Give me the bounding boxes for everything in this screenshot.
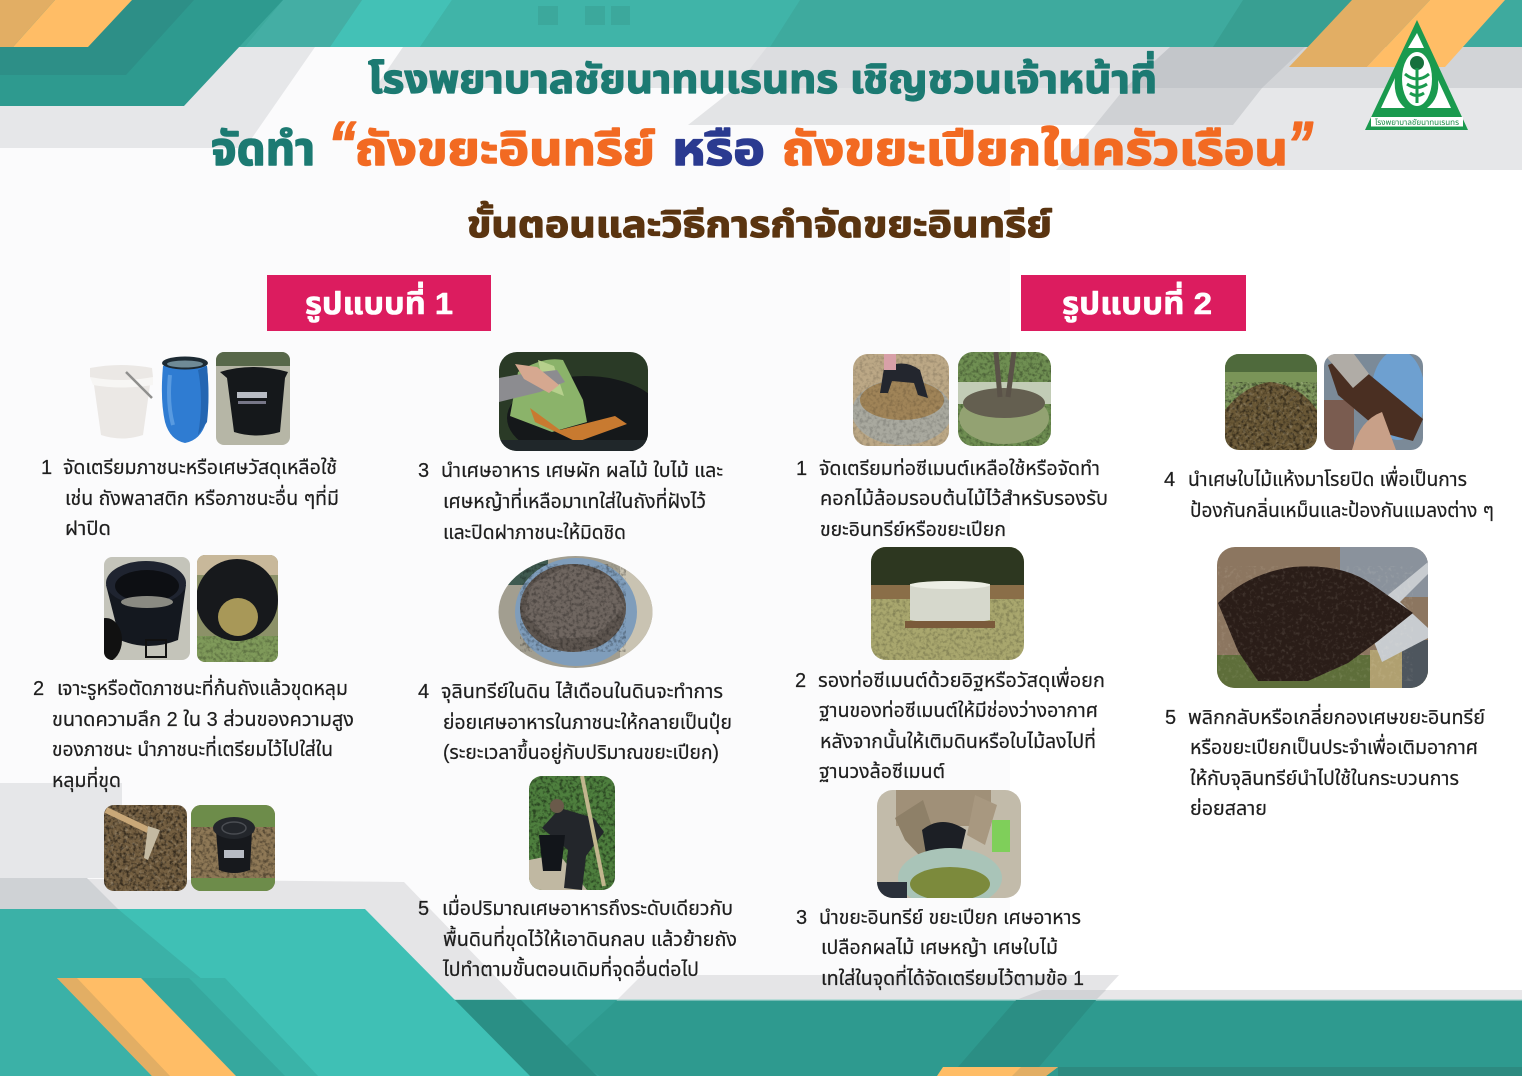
step 1 text, format 1: 1	[41, 457, 52, 479]
photo: compost in basin	[498, 555, 654, 668]
step 2 text, format 1: เจาะรูหรือตัดภาชนะที่ก้นถังแล้วขุดหลุม	[57, 674, 348, 701]
step 3 text, format 1: นำเศษอาหาร เศษผัก ผลไม้ ใบไม้ และ	[441, 459, 723, 482]
badge: format 1	[267, 275, 491, 331]
step 4 text, format 1: จุลินทรีย์ในดิน ไส้เดือนในดินจะทำการ	[441, 680, 723, 703]
photo: bin in the ground	[196, 555, 278, 662]
photo: food scraps in bin	[499, 352, 648, 451]
step 5 text, format 2: พลิกกลับหรือเกลี่ยกองเศษขยะอินทรีย์	[1188, 703, 1485, 729]
subtitle: ขั้นตอนและวิธีการกำจัดขยะอินทรีย์	[467, 200, 1052, 245]
photo: raised cement ring on grass	[871, 547, 1024, 660]
step 2 text, format 2: 2	[795, 670, 806, 692]
step 5 text, format 1	[418, 894, 737, 981]
step 5 text, format 1: ไปทำตามขั้นตอนเดิมที่จุดอื่นต่อไป	[442, 955, 699, 981]
step 1 text, format 1: จัดเตรียมภาชนะหรือเศษวัสดุเหลือใช้	[63, 456, 337, 479]
step 3 text, format 1	[418, 459, 723, 544]
photo: pile of dry leaves	[1225, 354, 1317, 450]
photo: people pouring waste	[877, 790, 1021, 908]
title line 1: โรงพยาบาลชัยนาทนเรนทร เชิญชวนเจ้าหน้าที่	[368, 51, 1157, 102]
step 4 text, format 1: (ระยะเวลาขึ้นอยู่กับปริมาณขยะเปียก)	[443, 738, 719, 765]
step 2 text, format 2	[795, 666, 1105, 783]
step 5 text, format 1: 5	[418, 898, 429, 920]
photo: digging soil	[104, 805, 187, 891]
step 1 text, format 2: 1	[796, 458, 807, 480]
step 5 text, format 2	[1165, 703, 1485, 820]
photo: blue barrel	[162, 356, 208, 443]
step 1 text, format 1: เช่น ถังพลาสติก หรือภาชนะอื่น ๆที่มี	[65, 484, 339, 510]
step 2 text, format 1: 2	[33, 678, 44, 700]
step 3 text, format 2	[796, 907, 1084, 990]
title line 2	[211, 110, 1313, 179]
title line 2: จัดทำ	[211, 123, 315, 175]
step 2 text, format 2: หลังจากนั้นให้เติมดินหรือใบไม้ลงไปที่	[820, 727, 1096, 753]
step 4 text, format 2: นำเศษใบไม้แห้งมาโรยปิด เพื่อเป็นการ	[1188, 465, 1467, 491]
step 5 text, format 1: พื้นดินที่ขุดไว้ให้เอาดินกลบ แล้วย้ายถัง	[443, 925, 737, 951]
step 3 text, format 2: 3	[796, 907, 807, 929]
title line 2: ”	[1287, 110, 1313, 179]
step 3 text, format 1: เศษหญ้าที่เหลือมาเทใส่ในถังที่ฝังไว้	[443, 487, 706, 513]
title line 2: “	[328, 110, 356, 179]
step 2 text, format 1: หลุมที่ขุด	[52, 766, 121, 792]
photo: cement ring with leaves	[852, 354, 952, 446]
step 1 text, format 1	[41, 456, 339, 540]
step 4 text, format 1: ย่อยเศษอาหารในภาชนะให้กลายเป็นปุ๋ย	[443, 711, 732, 734]
photo: bamboo ring around tree	[958, 352, 1051, 446]
step 3 text, format 1: 3	[418, 460, 429, 482]
step 5 text, format 2: ย่อยสลาย	[1190, 797, 1267, 820]
title line 2: ถังขยะอินทรีย์	[355, 123, 655, 175]
step 4 text, format 1: 4	[418, 681, 429, 703]
photo: bin with lid	[104, 557, 190, 660]
photo: bin buried with lid	[191, 805, 275, 891]
step 1 text, format 2: จัดเตรียมท่อซีเมนต์เหลือใช้หรือจัดทำ	[819, 457, 1100, 480]
photo: bottle of bio-liquid	[1324, 350, 1425, 450]
step 1 text, format 2: ขยะอินทรีย์หรือขยะเปียก	[820, 519, 1006, 541]
step 5 text, format 2: หรือขยะเปียกเป็นประจำเพื่อเติมอากาศ	[1190, 733, 1478, 759]
step 5 text, format 2: 5	[1165, 707, 1176, 729]
badge: format 2	[1021, 275, 1246, 331]
step 5 text, format 2: ให้กับจุลินทรีย์นำไปใช้ในกระบวนการ	[1190, 767, 1459, 790]
badge: format 1: รูปแบบที่ 1	[305, 281, 453, 322]
photo: man with bin	[529, 776, 615, 890]
step 3 text, format 1: และปิดฝาภาชนะให้มิดชิด	[443, 521, 626, 544]
step 4 text, format 1	[418, 680, 732, 765]
photo: white bucket	[90, 365, 153, 438]
step 3 text, format 2: นำขยะอินทรีย์ ขยะเปียก เศษอาหาร	[819, 907, 1081, 929]
step 2 text, format 1: ของภาชนะ นำภาชนะที่เตรียมไว้ไปใส่ใน	[52, 735, 333, 761]
step 2 text, format 2: ฐานวงล้อซีเมนต์	[819, 760, 945, 783]
step 1 text, format 1: ฝาปิด	[65, 518, 111, 540]
step 4 text, format 2	[1164, 465, 1494, 522]
step 4 text, format 2: 4	[1164, 469, 1175, 491]
step 1 text, format 2: คอกไม้ล้อมรอบต้นไม้ไว้สำหรับรองรับ	[820, 487, 1108, 510]
step 3 text, format 2: เทใส่ในจุดที่ได้จัดเตรียมไว้ตามข้อ 1	[821, 964, 1084, 990]
title line 2: ถังขยะเปียกในครัวเรือน	[782, 123, 1288, 175]
step 5 text, format 1: เมื่อปริมาณเศษอาหารถึงระดับเดียวกับ	[442, 894, 733, 920]
logo: hospital emblem: โรงพยาบาลชัยนาทนเรนทร	[1375, 118, 1459, 127]
title line 2: หรือ	[672, 123, 765, 175]
step 2 text, format 2: ฐานของท่อซีเมนต์ให้มีช่องว่างอากาศ	[819, 699, 1098, 722]
photo: compost on shovel	[1217, 547, 1428, 688]
step 4 text, format 2: ป้องกันกลิ่นเหม็นและป้องกันแมลงต่าง ๆ	[1190, 497, 1494, 522]
logo: hospital emblem	[1365, 20, 1468, 130]
step 3 text, format 2: เปลือกผลไม้ เศษหญ้า เศษใบไม้	[821, 936, 1058, 959]
step 1 text, format 2	[796, 457, 1108, 541]
photo: black bin	[216, 352, 290, 445]
step 2 text, format 2: รองท่อซีเมนต์ด้วยอิฐหรือวัสดุเพื่อยก	[818, 666, 1105, 692]
step 2 text, format 1	[33, 674, 354, 792]
badge: format 2: รูปแบบที่ 2	[1062, 281, 1212, 322]
step 2 text, format 1: ขนาดความลึก 2 ใน 3 ส่วนของความสูง	[52, 708, 354, 732]
